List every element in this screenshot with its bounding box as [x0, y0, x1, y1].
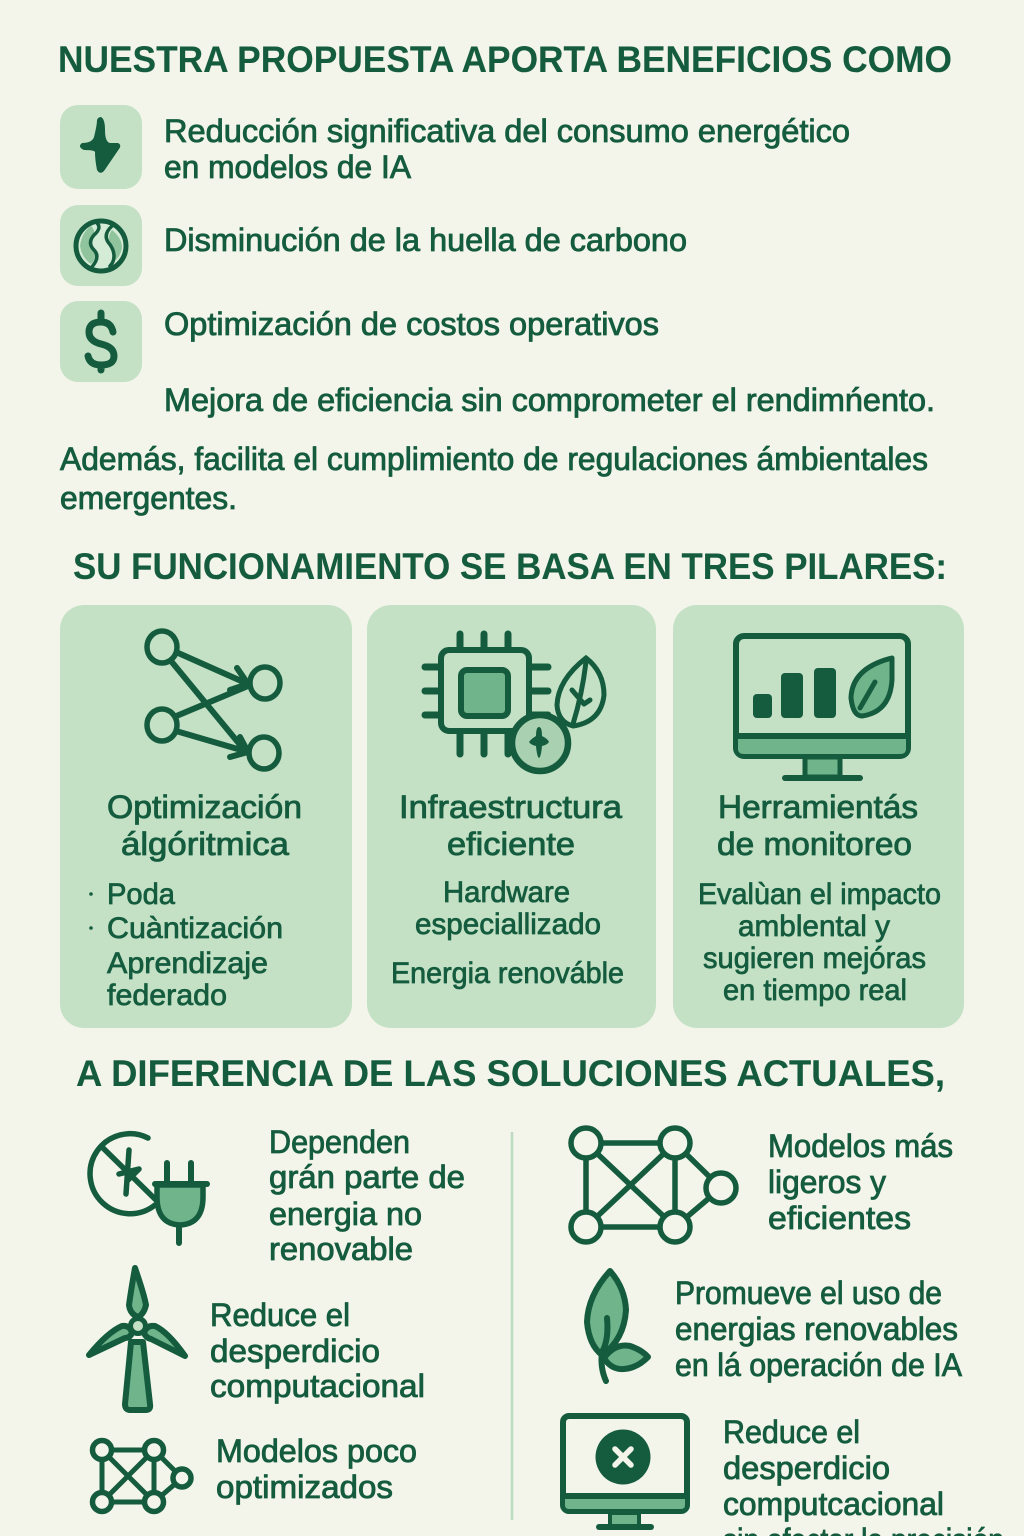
item: reduce waste right: [563, 1414, 1004, 1536]
text: hardware and energy: Hardware: [443, 876, 570, 909]
list: techniques: Aprendizaje: [107, 947, 268, 980]
text: non-renewable dependency: renovable: [269, 1231, 413, 1267]
text: renewable energy: energias renovables: [675, 1311, 958, 1347]
heading: monitoring: de monitoreo: [717, 826, 912, 862]
icon: chip with leaf: [425, 634, 604, 771]
icon: energy spark: [60, 105, 142, 189]
item: poorly optimized models: [92, 1433, 417, 1512]
title: benefits heading: NUESTRA PROPUESTA APORTA BENEFICIOS COMO: [58, 39, 952, 80]
text: lighter models: [768, 1128, 953, 1236]
heading: optimization: álgóritmica: [121, 826, 289, 862]
text: lighter models: Modelos más: [768, 1128, 953, 1164]
text: reduce waste without precision loss: computcacional: [723, 1486, 944, 1522]
text: hardware and energy: [391, 876, 624, 990]
text: poorly optimized: Modelos poco: [216, 1433, 417, 1469]
text: energy reduction: [164, 113, 850, 185]
icon: leaf sprout: [587, 1271, 648, 1381]
heading: infrastructure: [399, 789, 622, 862]
text: operating costs: Optimización de costos operativos: [164, 306, 659, 342]
icon: wind turbine: [89, 1268, 185, 1410]
heading: monitoring: Herramientás: [718, 789, 918, 825]
icon: globe: [60, 205, 142, 286]
text: regulations: Además, facilita el cumplimiento de regulaciones ámbientales: [60, 441, 928, 477]
item: lighter models: [571, 1128, 953, 1242]
heading: infrastructure: Infraestructura: [399, 789, 622, 825]
text: monitoring description: en tiempo real: [723, 974, 907, 1007]
list: techniques: Cuàntización: [107, 912, 283, 945]
text: reduce waste without precision loss: Reduce el: [723, 1414, 860, 1450]
text: renewable energy: Promueve el uso de: [675, 1275, 942, 1311]
item: renewable energy: [587, 1271, 963, 1383]
text: non-renewable dependency: energia no: [269, 1196, 422, 1232]
benefit row: energy reduction: [60, 105, 850, 189]
text: monitoring description: Evalùan el impacto: [698, 878, 941, 911]
icon: small network: [92, 1440, 191, 1512]
text: non-renewable dependency: grán parte de: [269, 1159, 465, 1195]
text: poorly optimized: optimizados: [216, 1469, 393, 1505]
heading: comparison: A DIFERENCIA DE LAS SOLUCIONES ACTUALES,: [76, 1053, 945, 1094]
heading: optimization: Optimización: [107, 789, 302, 825]
text: renewable energy: en lá operación de IA: [675, 1347, 963, 1383]
text: renewable energy: [675, 1275, 963, 1383]
text: monitoring description: sugieren mejóras: [703, 942, 926, 975]
panel: algorithmic optimization: [60, 605, 352, 1028]
item: non-renewable energy: [90, 1124, 465, 1267]
text: lighter models: ligeros y: [768, 1164, 886, 1200]
list: techniques: Poda: [107, 878, 175, 911]
text: poorly optimized: [216, 1433, 417, 1505]
icon: monitor with chart and leaf: [736, 636, 908, 778]
text: regulations: [60, 441, 928, 516]
text: energy reduction: en modelos de IA: [164, 149, 412, 185]
heading: three pillars: SU FUNCIONAMIENTO SE BASA EN TRES PILARES:: [73, 546, 947, 587]
text: reduce waste without precision loss: desperdicio: [723, 1450, 890, 1486]
text: reduce waste without precision loss: [723, 1414, 1004, 1536]
icon: neural network: [147, 631, 280, 769]
text: monitoring description: amblental y: [738, 910, 890, 943]
icon: large network: [571, 1128, 736, 1242]
text: energy reduction: Reducción significativa del consumo energético: [164, 113, 850, 149]
text: reduce waste: desperdicio: [210, 1333, 380, 1369]
heading: monitoring: [717, 789, 918, 862]
text: hardware and energy: especiallizado: [415, 908, 601, 941]
text: monitoring description: [698, 878, 941, 1007]
text: lighter models: eficientes: [768, 1200, 911, 1236]
text: efficiency improvement: Mejora de eficiencia sin comprometer el rendimńento.: [164, 382, 935, 418]
icon: crossed sun and plug: [90, 1134, 207, 1243]
list: techniques: [89, 878, 283, 1012]
text: non-renewable dependency: [269, 1124, 465, 1267]
heading: infrastructure: eficiente: [447, 826, 575, 862]
icon: monitor with x: [563, 1416, 687, 1527]
heading: optimization: [107, 789, 302, 862]
icon: dollar sign: [60, 301, 142, 382]
benefit row: carbon footprint: [60, 205, 687, 286]
panel: monitoring tools: [673, 605, 964, 1028]
text: reduce waste: [210, 1297, 425, 1404]
text: non-renewable dependency: Dependen: [269, 1124, 410, 1160]
text: reduce waste: computacional: [210, 1368, 425, 1404]
list: techniques: federado: [107, 979, 227, 1012]
text: carbon footprint: Disminución de la huella de carbono: [164, 222, 687, 258]
text: hardware and energy: Energia renováble: [391, 957, 624, 990]
text: reduce waste: Reduce el: [210, 1297, 350, 1333]
item: reduce waste left: [89, 1268, 425, 1410]
benefit row: operating costs: [60, 301, 659, 382]
text: regulations: emergentes.: [60, 480, 237, 516]
panel: efficient infrastructure: [367, 605, 656, 1028]
